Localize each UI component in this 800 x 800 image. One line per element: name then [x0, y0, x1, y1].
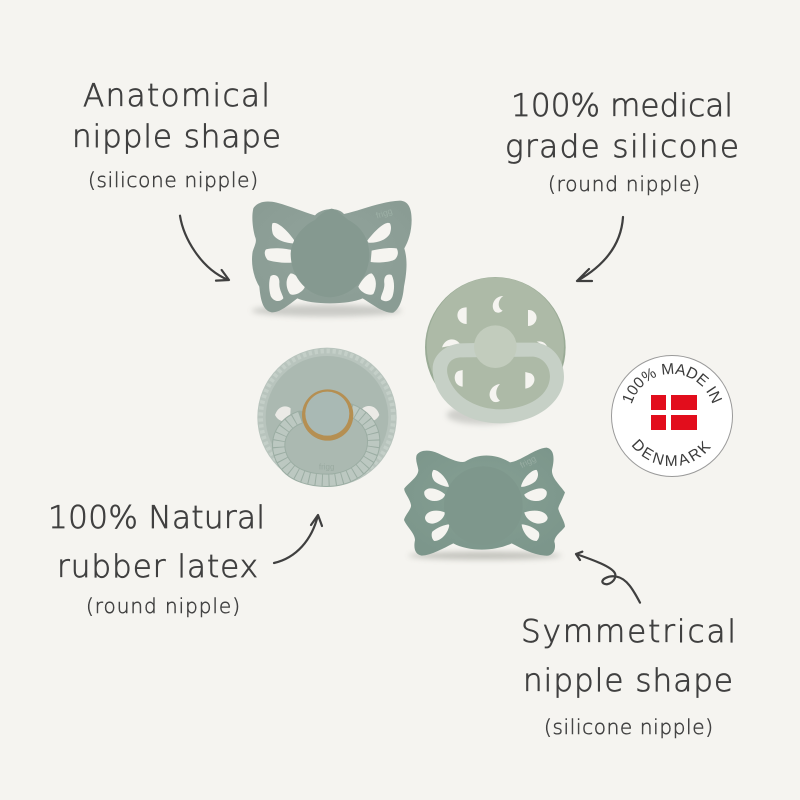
- arrow: to moon pacifier: [577, 217, 623, 281]
- heading: anatomical nipple shape: nipple shape: [72, 119, 281, 155]
- heading: medical grade silicone: [505, 88, 739, 196]
- twisted ring handle: [279, 410, 374, 480]
- pacifier: moon, glow ring: [425, 277, 566, 424]
- pacifier: lace, symmetrical: frigg: [518, 453, 538, 470]
- rubber nipple: [302, 389, 353, 441]
- heading: symmetrical nipple shape: Symmetrical: [521, 614, 736, 650]
- arrow: to rope pacifier: [274, 515, 322, 563]
- heading: anatomical nipple shape: (silicone nipple): [88, 168, 258, 192]
- heading: anatomical nipple shape: [72, 78, 281, 192]
- heading: medical grade silicone: (round nipple): [548, 172, 700, 196]
- heading: natural rubber latex: (round nipple): [86, 594, 240, 618]
- pacifier: rope, natural rubber: frigg: [319, 462, 334, 471]
- heading: symmetrical nipple shape: (silicone nipple): [544, 715, 713, 739]
- heading: natural rubber latex: 100% Natural: [48, 500, 265, 536]
- heading: anatomical nipple shape: Anatomical: [83, 78, 270, 114]
- moon phase cut-outs: [442, 296, 547, 402]
- pacifier: rope, natural rubber: [257, 348, 397, 487]
- heading: symmetrical nipple shape: nipple shape: [523, 663, 733, 699]
- flag of Denmark: [651, 395, 697, 430]
- pacifier: butterfly, anatomical: [252, 201, 412, 317]
- heading: natural rubber latex: rubber latex: [57, 549, 258, 585]
- heading: medical grade silicone: grade silicone: [505, 129, 739, 165]
- heading: natural rubber latex: [48, 500, 265, 618]
- arrow: to lace pacifier: [576, 552, 640, 603]
- heading: symmetrical nipple shape: [521, 614, 736, 739]
- heading: medical grade silicone: 100% medical: [511, 88, 733, 124]
- badge text bottom: DENMARK: [632, 439, 712, 466]
- arrow: to butterfly pacifier: [180, 216, 229, 281]
- badge: 100% made in Denmark: [611, 355, 733, 477]
- pacifier: lace, symmetrical: [404, 448, 565, 560]
- pacifier: butterfly, anatomical: frigg: [375, 206, 394, 221]
- badge text top: 100% MADE IN: [623, 363, 722, 404]
